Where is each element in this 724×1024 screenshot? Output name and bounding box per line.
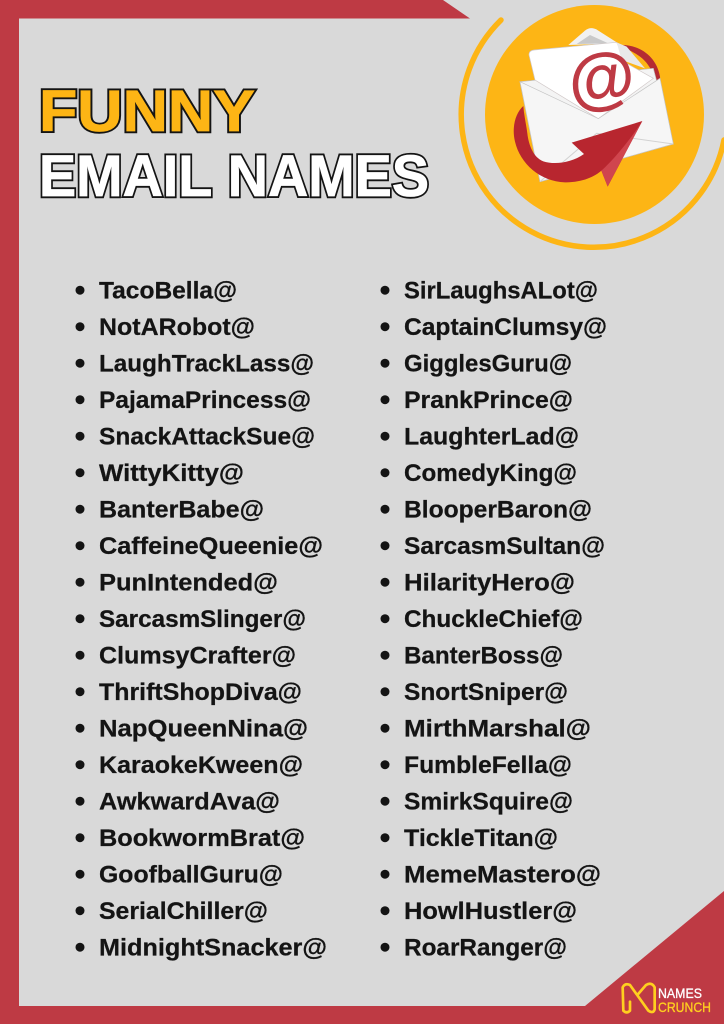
item: SnackAttackSue@	[99, 424, 315, 450]
item: WittyKitty@	[99, 460, 244, 487]
item: SarcasmSlinger@	[99, 606, 306, 633]
item: MemeMastero@	[404, 862, 601, 888]
item: PunIntended@	[99, 570, 278, 596]
item: BanterBoss@	[404, 642, 563, 670]
red frame: bottom border with corner triangle	[0, 891, 724, 1024]
item: SirLaughsALot@	[404, 278, 598, 304]
item: MidnightSnacker@	[99, 934, 327, 962]
item: HowlHustler@	[404, 898, 577, 925]
item: SarcasmSultan@	[404, 533, 605, 560]
item: LaughTrackLass@	[99, 350, 314, 378]
logo text: NAMES: NAMES	[658, 985, 702, 1001]
item: RoarRanger@	[404, 934, 567, 962]
item: PajamaPrincess@	[99, 387, 311, 414]
title line: EMAIL NAMES: EMAIL NAMES	[39, 144, 429, 209]
icon: email badge	[461, 5, 724, 247]
item: LaughterLad@	[404, 424, 579, 450]
item: PrankPrince@	[404, 387, 573, 414]
item: ThriftShopDiva@	[99, 679, 302, 706]
title line: FUNNY: FUNNY	[39, 79, 255, 144]
list column 1	[76, 278, 327, 962]
item: MirthMarshal@	[404, 716, 591, 742]
icon: envelope with arrow	[514, 28, 673, 187]
title line: EMAIL NAMES: EMAIL NAMES	[39, 144, 429, 209]
red frame: top and left border	[0, 0, 470, 1006]
icon: N mark	[623, 984, 655, 1012]
item: ClumsyCrafter@	[99, 642, 296, 670]
item: AwkwardAva@	[99, 788, 280, 816]
item: BookwormBrat@	[99, 825, 305, 852]
item: BanterBabe@	[99, 496, 264, 524]
item: CaptainClumsy@	[404, 314, 607, 341]
item: ChuckleChief@	[404, 606, 583, 633]
item: SerialChiller@	[99, 898, 268, 925]
item: NotARobot@	[99, 314, 255, 341]
logo text: CRUNCH: CRUNCH	[658, 999, 711, 1015]
orange ring arc	[461, 20, 724, 247]
item: HilarityHero@	[404, 570, 575, 596]
item: SnortSniper@	[404, 679, 568, 706]
item: NapQueenNina@	[99, 716, 308, 742]
item: GigglesGuru@	[404, 350, 572, 378]
title line: FUNNY: FUNNY	[39, 79, 255, 144]
item: SmirkSquire@	[404, 788, 573, 816]
item: GoofballGuru@	[99, 862, 283, 888]
item: BlooperBaron@	[404, 496, 592, 524]
icon: envelope with arrow: @	[564, 37, 639, 119]
item: ComedyKing@	[404, 460, 577, 487]
item: TacoBella@	[99, 278, 237, 304]
logo: Names Crunch	[623, 984, 711, 1015]
list column 2	[380, 278, 607, 962]
item: KaraokeKween@	[99, 752, 303, 779]
orange circle	[485, 5, 704, 224]
item: TickleTitan@	[404, 825, 558, 852]
title	[39, 79, 429, 209]
item: CaffeineQueenie@	[99, 533, 323, 560]
item: FumbleFella@	[404, 752, 572, 779]
